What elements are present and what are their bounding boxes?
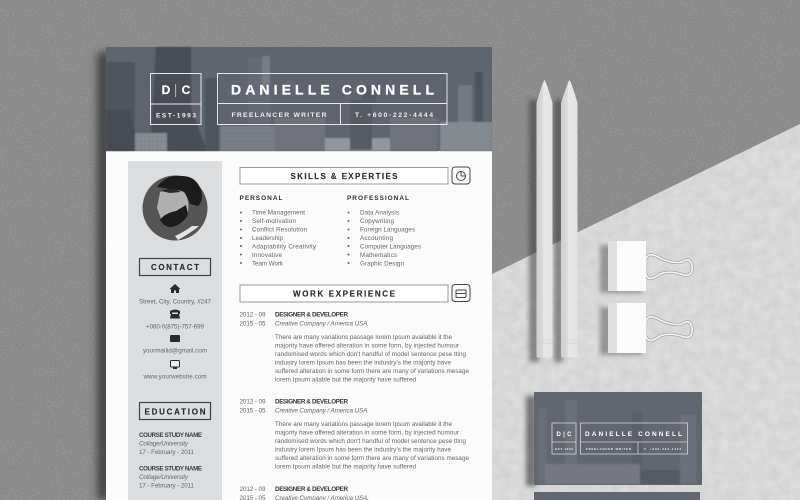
- work entry 2: 2015 - 05: [240, 408, 266, 414]
- pencil 1: [536, 80, 552, 358]
- contact heading: CONTACT: [151, 263, 199, 272]
- portrait photo: [142, 176, 208, 240]
- work entry 2: DESIGNER & DEVELOPER: [275, 398, 348, 406]
- logo box: D: [162, 83, 171, 97]
- icon: monitor: [170, 360, 180, 369]
- work entry 2: majority have offered alteration in some form, by injected humour: [275, 430, 459, 436]
- work entry 3: [240, 486, 369, 500]
- education heading: [140, 402, 210, 420]
- card logo and name: DANIELLE CONNELL: [585, 431, 682, 438]
- contact heading: [140, 258, 210, 276]
- name box: FREELANCER WRITER: [232, 112, 327, 119]
- work entry 2: 2012 - 09: [240, 398, 266, 406]
- skills lists: Leadership: [252, 235, 283, 242]
- education entries: 17 - February - 2011: [139, 482, 195, 490]
- skills lists: Time Management: [252, 210, 305, 216]
- work entry 3: 2012 - 09: [240, 486, 266, 493]
- name box: [218, 74, 447, 124]
- binder clip top: [600, 241, 692, 293]
- work entry 1: DESIGNER & DEVELOPER: [275, 312, 348, 318]
- work entry 2: [240, 398, 469, 470]
- work entry 2: randomised words which don't handful of model sentence pese tting: [275, 438, 466, 445]
- work entry 1: industry lorem Ipsum has been the industry's the majority have: [275, 360, 451, 366]
- work entry 1: randomised words which don't handful of model sentence pese tting: [275, 351, 466, 358]
- skills lists: Accounting: [360, 235, 393, 242]
- resume paper: [97, 47, 492, 500]
- work entry 2: industry lorem Ipsum has been the industry's the majority have: [275, 446, 451, 454]
- skills lists: Foreign Languages: [360, 226, 415, 234]
- logo box: C: [182, 83, 191, 97]
- work entry 2: There are many variations passage lorem Ipsum available it the: [275, 421, 452, 428]
- skills lists: Innovative: [252, 252, 282, 259]
- business card: [526, 392, 702, 486]
- education entries: [139, 432, 202, 490]
- skills lists: PROFESSIONAL: [347, 195, 409, 202]
- header banner: [106, 47, 492, 151]
- contact details: yourmailid@gmail.com: [143, 348, 207, 354]
- skills lists: PERSONAL: [240, 195, 283, 202]
- icon: pie chart: [452, 167, 470, 184]
- skills lists: Data Analysis: [360, 210, 399, 216]
- card logo and name: EST-1993: [555, 447, 573, 451]
- logo box: EST-1993: [156, 112, 196, 120]
- name box: DANIELLE CONNELL: [231, 82, 434, 98]
- work entry 1: majority have offered alteration in some form, by injected humour: [275, 342, 459, 350]
- city skyline: [106, 47, 492, 151]
- work entry 1: [240, 312, 469, 384]
- education heading: EDUCATION: [144, 408, 206, 416]
- skills lists: Adaptability Creativity: [252, 244, 317, 250]
- work entry 1: lorem Ipsum ailable but the majority have suffered: [275, 376, 416, 384]
- work entry 2: suffered alteration in some form there are many of variations mesage: [275, 455, 469, 462]
- skills lists: Self-motivation: [252, 218, 296, 225]
- icon: briefcase: [452, 284, 470, 302]
- skills lists: Conflict Resolution: [252, 226, 307, 234]
- skills lists: Computer Languages: [360, 244, 421, 250]
- icon: home: [170, 284, 180, 293]
- skills lists: Graphic Design: [360, 260, 404, 268]
- icon: telephone: [170, 310, 180, 318]
- contact details: Street, City, Country, #247: [139, 298, 212, 306]
- education entries: COURSE STUDY NAME: [139, 466, 202, 472]
- sidebar: [128, 161, 222, 500]
- work entry 2: Creative Company / America USA.: [275, 408, 369, 414]
- work entry 1: suffered alteration in some form there are many of variations mesage: [275, 368, 469, 375]
- contact details: +060-0(875)-757-699: [146, 324, 205, 330]
- skills heading: [240, 168, 448, 184]
- education entries: 17 - February - 2011: [139, 449, 195, 456]
- work entry 2: lorem Ipsum ailable but the majority have suffered: [275, 464, 416, 470]
- card skyline: [538, 400, 696, 484]
- work experience heading: WORK EXPERIENCE: [293, 290, 396, 298]
- work entry 3: DESIGNER & DEVELOPER: [275, 486, 348, 493]
- contact details: www.yourwebsite.com: [142, 374, 206, 380]
- logo box: [150, 74, 201, 124]
- name box: T. +600-222-4444: [355, 112, 433, 119]
- pencils: [529, 80, 578, 362]
- work entry 1: 2015 - 05: [240, 320, 266, 328]
- work entry 1: Creative Company / America USA.: [275, 320, 369, 328]
- second business card: [534, 492, 700, 500]
- card logo and name: T. +600-222-4444: [644, 447, 681, 451]
- education entries: Collage/University: [139, 440, 189, 448]
- skills lists: Team Work: [252, 260, 284, 268]
- card logo and name: D|C: [556, 432, 572, 438]
- work entry 1: 2012 - 09: [240, 312, 266, 318]
- card logo and name: [552, 423, 688, 454]
- skills lists: Copywriting: [360, 218, 394, 225]
- card logo and name: FREELANCER WRITER: [586, 447, 632, 451]
- pencil 2: [561, 80, 578, 358]
- work experience heading: [240, 285, 448, 302]
- education entries: COURSE STUDY NAME: [139, 432, 202, 439]
- contact details: [139, 284, 212, 380]
- icon: mail: [170, 335, 180, 342]
- work entry 1: There are many variations passage lorem Ipsum available it the: [275, 334, 452, 341]
- skills heading: SKILLS & EXPERTIES: [290, 172, 398, 181]
- binder clip bottom: [600, 303, 692, 355]
- skills lists: [240, 195, 421, 268]
- skills lists: Mathematics: [360, 252, 397, 259]
- education entries: Collage/University: [139, 474, 189, 481]
